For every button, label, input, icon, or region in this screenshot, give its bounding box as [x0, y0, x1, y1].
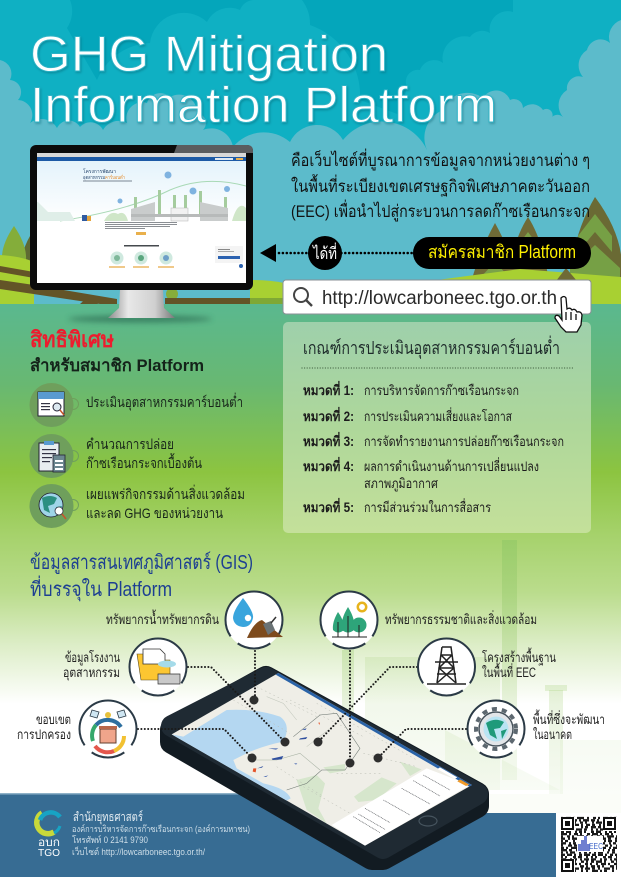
footer contact text: เว็บไซต์ http://lowcarboneec.tgo.or.th/ — [72, 845, 205, 857]
icon: transmission tower — [427, 647, 466, 684]
privilege 3 text — [86, 485, 245, 521]
phone — [172, 673, 477, 858]
criterion 2 — [303, 406, 512, 424]
icon: hand cursor — [555, 296, 582, 332]
criterion 5: การมีส่วนร่วมในการสื่อสาร — [364, 498, 491, 515]
privilege 2 text: ก๊าซเรือนกระจกเบื้องต้น — [86, 453, 202, 471]
map road speckles — [233, 687, 417, 813]
footer contact text: องค์การบริหารจัดการก๊าซเรือนกระจก (องค์การมหาชน) — [72, 823, 250, 834]
privilege 3 — [30, 484, 245, 528]
monitor with website screenshot — [30, 145, 253, 318]
TGO logo: TGO — [38, 848, 60, 859]
criterion 3: การจัดทำรายงานการปล่อยก๊าซเรือนกระจก — [364, 434, 564, 449]
criterion 4: ผลการดำเนินงานด้านการเปลี่ยนแปลง — [364, 457, 539, 474]
search box — [283, 280, 591, 314]
title: GHG Mitigation — [30, 26, 388, 82]
footer gap right of phone — [330, 794, 621, 813]
industrial zones — [253, 723, 320, 777]
label: การปกครอง — [17, 727, 71, 742]
label: ทรัพยากรธรรมชาติและสิ่งแวดล้อม — [385, 610, 537, 627]
footer band — [0, 793, 621, 877]
background: clouds — [0, 0, 621, 310]
white side panel — [332, 768, 470, 846]
label: โครงสร้างพื้นฐาน — [482, 647, 556, 666]
criterion 5: หมวดที่ 5: — [303, 497, 354, 515]
GIS heading: ข้อมูลสารสนเทศภูมิศาสตร์ (GIS) — [30, 551, 253, 575]
QR code — [556, 813, 621, 877]
website illustration — [37, 161, 246, 221]
footer contact text: โทรศัพท์ 0 2141 9790 — [72, 834, 148, 845]
criterion 4: สภาพภูมิอากาศ — [364, 476, 438, 492]
label — [482, 647, 556, 680]
icon: clipboard and calculator — [39, 441, 65, 472]
province borders — [250, 697, 360, 790]
TGO logo: อบก — [38, 837, 60, 849]
background: trees and hills — [0, 197, 621, 305]
icon: gear and globe — [476, 709, 516, 749]
GIS item: future development area — [468, 700, 605, 758]
criterion 3 — [303, 431, 564, 449]
GIS heading — [30, 551, 253, 602]
header strip — [276, 673, 472, 787]
badge: at: ได้ที่ — [311, 242, 337, 263]
label — [533, 709, 605, 742]
connector lines — [138, 651, 466, 763]
criterion 4 — [303, 456, 539, 492]
icon: water drop — [233, 598, 253, 627]
label — [17, 712, 71, 742]
monitor shadow — [68, 316, 212, 322]
website headline — [83, 168, 132, 182]
title: Information Platform — [30, 77, 497, 133]
criterion 4: หมวดที่ 4: — [303, 456, 354, 474]
privilege 3 text: และลด GHG ของหน่วยงาน — [86, 505, 223, 521]
criterion 3: หมวดที่ 3: — [303, 431, 354, 449]
phone home button — [419, 816, 437, 826]
arrow: from sign-up pill to monitor — [260, 244, 414, 262]
website headline: โครงการพัฒนา — [83, 168, 116, 175]
background: faint factory silhouette — [342, 540, 621, 795]
icon: trees — [333, 607, 366, 632]
website header bar — [37, 153, 246, 161]
criterion 1: การบริหารจัดการก๊าซเรือนกระจก — [364, 383, 519, 398]
land patches — [297, 762, 422, 823]
badge: at — [308, 236, 342, 270]
QR EEC badge: EEC — [589, 842, 603, 851]
website service icons — [109, 252, 174, 268]
intro paragraph — [291, 148, 590, 222]
criterion 5 — [303, 497, 491, 515]
footer contact text — [72, 810, 250, 857]
icon: magnifier — [294, 288, 312, 306]
GIS item: factory data — [63, 638, 186, 696]
icon: soil and shovel — [247, 620, 283, 638]
criterion 2: การประเมินความเสี่ยงและโอกาส — [364, 407, 512, 424]
privilege 1 text: ประเมินอุตสาหกรรมคาร์บอนต่ำ — [86, 393, 243, 411]
label: อุตสาหกรรม — [63, 665, 120, 681]
privilege 3 text: เผยแพร่กิจกรรมด้านสิ่งแวดล้อม — [86, 485, 245, 502]
phone front — [172, 678, 477, 848]
criterion 2: หมวดที่ 2: — [303, 406, 354, 424]
website chat popup — [215, 246, 243, 268]
panel heading: เกณฑ์การประเมินอุตสาหกรรมคาร์บอนต่ำ — [303, 335, 560, 359]
footer contact text: สำนักยุทธศาสตร์ — [73, 810, 143, 825]
label: ในพื้นที่ EEC — [482, 662, 536, 680]
sign-up pill — [413, 237, 591, 269]
background: sky — [0, 0, 621, 310]
website headline: อุตสาหกรรมคาร์บอนต่ำ — [83, 174, 125, 181]
label — [63, 649, 120, 681]
monitor frame — [30, 145, 253, 290]
GIS item: natural resources — [320, 592, 537, 648]
icon: podium ring — [92, 720, 124, 752]
phone screen map — [172, 673, 472, 846]
label: ทรัพยากรน้ำทรัพยากรดิน — [106, 609, 219, 627]
GIS item: administrative boundary — [17, 700, 136, 758]
privilege 1 — [30, 383, 243, 427]
privileges heading: สำหรับสมาชิก Platform — [30, 356, 204, 375]
monitor stand — [108, 290, 175, 318]
label: ข้อมูลโรงงาน — [65, 649, 120, 666]
privileges heading: สิทธิพิเศษ — [30, 327, 114, 352]
icon: browser report — [38, 392, 64, 416]
sign-up pill: สมัครสมาชิก Platform — [428, 242, 576, 262]
map pins — [248, 696, 382, 768]
privilege 2 text: คำนวณการปล่อย — [86, 436, 174, 452]
label: ขอบเขต — [36, 712, 71, 727]
privilege 2 text — [86, 436, 202, 471]
privileges heading — [30, 327, 204, 375]
criteria panel — [283, 322, 591, 533]
background: green ground gradient — [0, 304, 621, 704]
title — [30, 26, 497, 133]
sea — [172, 710, 291, 801]
GIS heading: ที่บรรจุใน Platform — [30, 575, 172, 602]
icon: globe with magnifier — [39, 493, 66, 519]
url text: http://lowcarboneec.tgo.or.th — [322, 288, 557, 309]
criterion 1 — [303, 380, 519, 398]
icon: folder and factory — [137, 654, 170, 680]
website body text — [105, 222, 177, 246]
icon: sun gear — [358, 603, 366, 611]
phone body side — [172, 678, 477, 858]
privilege 2 — [30, 434, 202, 478]
TGO logo — [37, 812, 60, 859]
monitor screen — [37, 153, 246, 283]
GIS item: water and soil — [106, 592, 283, 648]
criterion 1: หมวดที่ 1: — [303, 380, 354, 398]
GIS item: infrastructure — [418, 638, 556, 696]
QR finder marks — [561, 817, 617, 873]
label: ในอนาคต — [533, 726, 572, 742]
